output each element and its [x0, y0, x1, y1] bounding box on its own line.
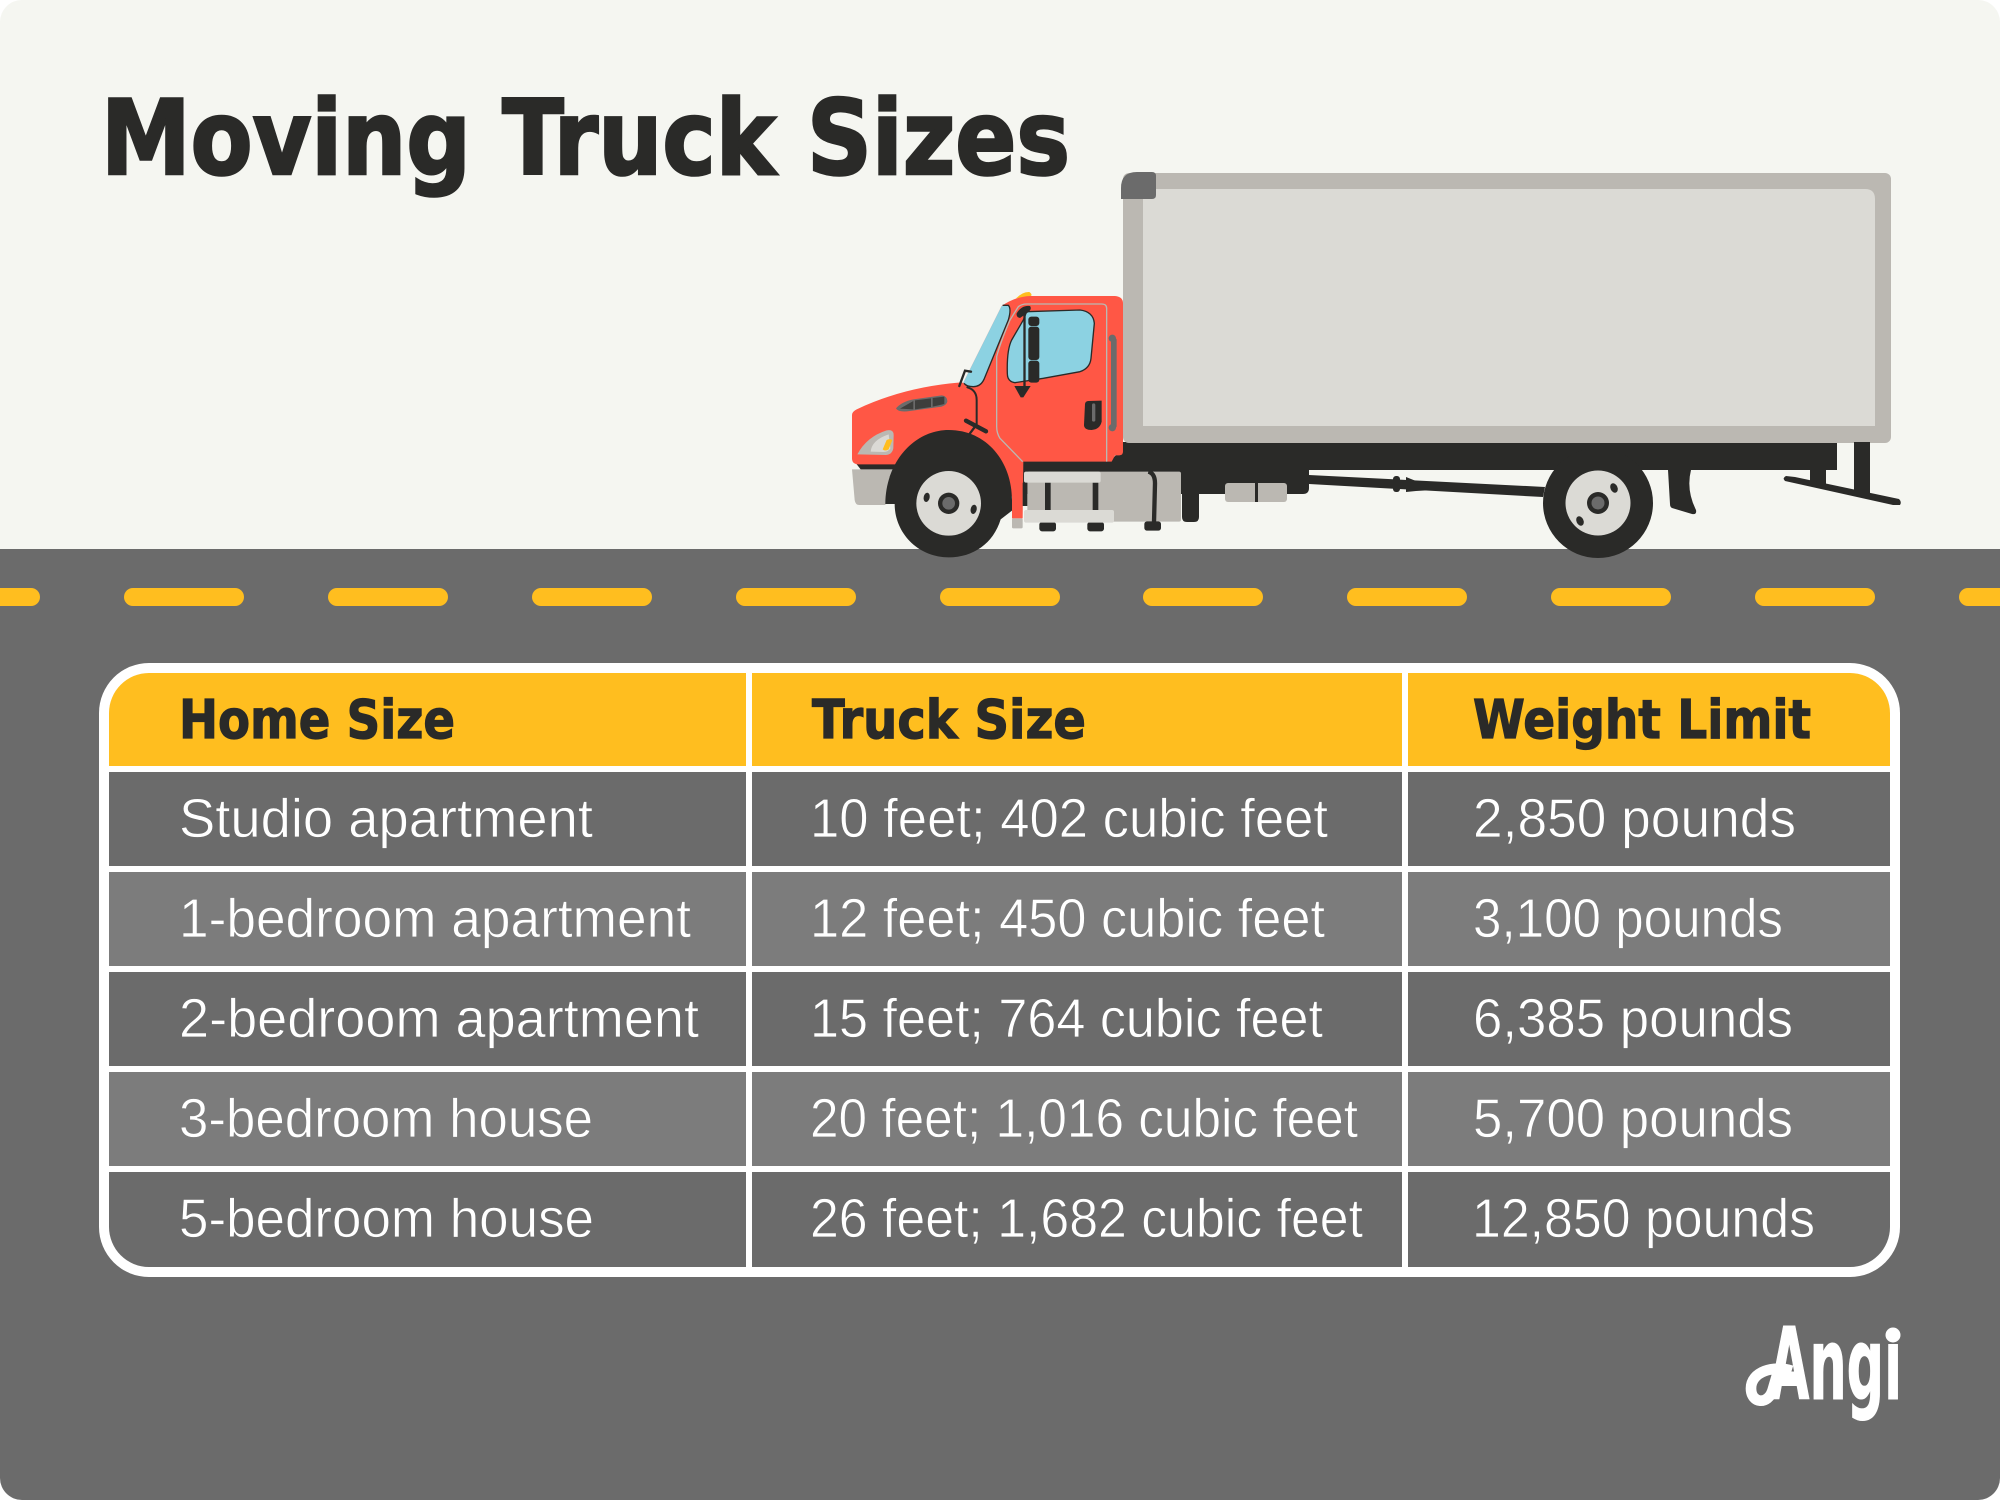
row: 3-bedroom house: 3-bedroom house [179, 1087, 593, 1149]
wiper [959, 371, 986, 433]
door handle [1084, 401, 1102, 430]
grab rail [1109, 335, 1117, 431]
row: 2-bedroom apartment [179, 987, 1793, 1049]
logo: Angi [1751, 1306, 1904, 1423]
rear lift gate [1784, 442, 1901, 505]
row: 5-bedroom house: 26 feet; 1,682 cubic feet [810, 1187, 1363, 1249]
black fender and front tyre [885, 430, 1012, 557]
row: 3-bedroom house: 5,700 pounds [1473, 1087, 1793, 1149]
sky background [0, 0, 2000, 549]
illustration: moving truck [852, 172, 1901, 558]
row: studio apartment [179, 787, 1796, 849]
table frame [99, 663, 1900, 1277]
title: Moving Truck Sizes [101, 79, 1070, 199]
header row: Weight Limit [1473, 688, 1811, 751]
hood vent [896, 395, 947, 411]
row: 5-bedroom house: 12,850 pounds [1472, 1187, 1815, 1249]
mud flap [1668, 470, 1696, 514]
chassis frame [1023, 442, 1837, 522]
windshield edge [964, 305, 1010, 387]
windshield [963, 305, 1010, 387]
row: 2-bedroom apartment: 6,385 pounds [1473, 987, 1793, 1049]
gray side boxes [1225, 483, 1287, 502]
black under-hood stripe [856, 463, 897, 469]
fuel tank [1023, 472, 1181, 531]
row: 1-bedroom apartment: 12 feet; 450 cubic feet [810, 887, 1325, 949]
header row: Home Size [179, 688, 455, 751]
roof marker [1016, 292, 1032, 298]
cab and front end (drawn in 3x local coordinates) [852, 292, 1181, 557]
header row [179, 688, 1811, 751]
row: 1-bedroom apartment: 3,100 pounds [1473, 887, 1783, 949]
side mirror [1014, 306, 1039, 397]
row: 2-bedroom apartment: 2-bedroom apartment [179, 987, 699, 1049]
rear axle drive shaft [1309, 475, 1545, 497]
row: studio apartment: 2,850 pounds [1473, 787, 1796, 849]
headlight [857, 430, 894, 455]
row: 3-bedroom house [179, 1087, 1793, 1149]
road [0, 549, 2000, 1500]
front hub [916, 471, 981, 536]
table cells [109, 673, 1890, 1267]
row: 2-bedroom apartment: 15 feet; 764 cubic feet [810, 987, 1323, 1049]
header row: Truck Size [812, 688, 1086, 751]
row: 5-bedroom house: 5-bedroom house [179, 1187, 594, 1249]
rear wheel [1543, 448, 1653, 558]
data table [99, 663, 1900, 1277]
row: 5-bedroom house [179, 1187, 1815, 1249]
red step strip bottom [1012, 518, 1023, 528]
door outline [997, 304, 1107, 462]
row: 1-bedroom apartment [179, 887, 1783, 949]
row: 1-bedroom apartment: 1-bedroom apartment [179, 887, 691, 949]
row: studio apartment: Studio apartment [179, 787, 593, 849]
row: 3-bedroom house: 20 feet; 1,016 cubic feet [810, 1087, 1358, 1149]
cargo box [1121, 172, 1891, 443]
cab body [852, 296, 1123, 518]
side window [1007, 310, 1094, 383]
row: studio apartment: 10 feet; 402 cubic feet [810, 787, 1328, 849]
bumper [852, 469, 894, 505]
